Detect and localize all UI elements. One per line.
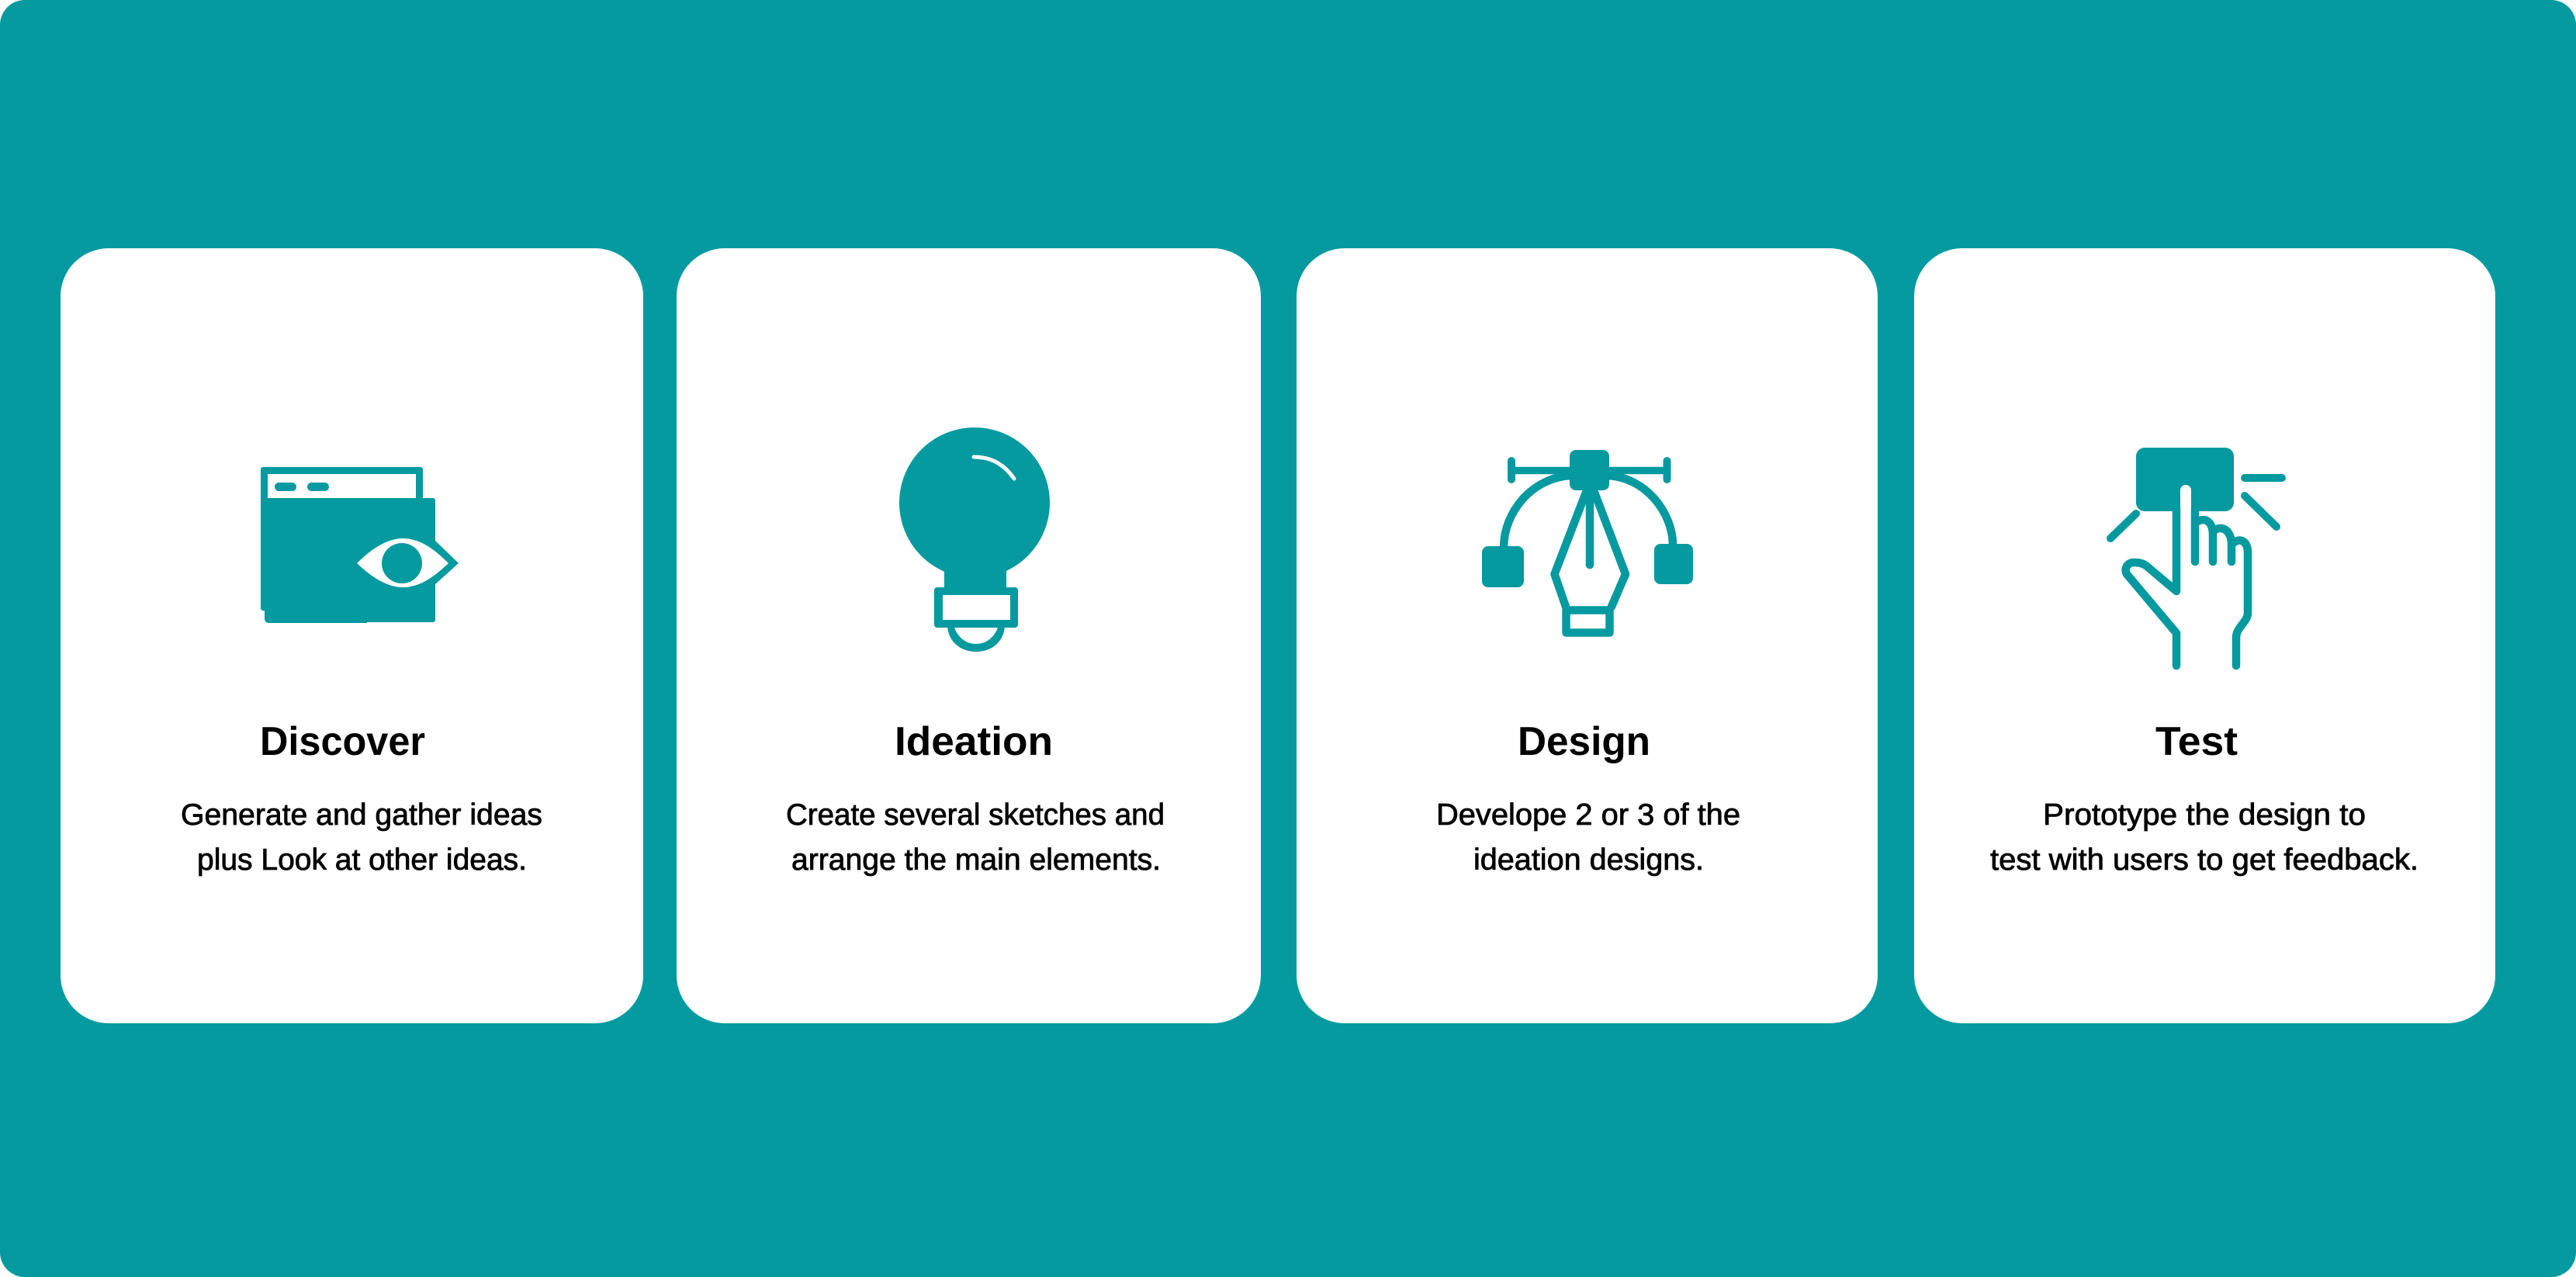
description: Ideation: Create several sketches and [786,798,1165,832]
heading: Design: Design [1518,719,1650,764]
heading: Discover: Discover [260,719,425,764]
description: Design: Develope 2 or 3 of the [1436,798,1740,832]
description: Design [1436,798,1740,877]
heading: Test: Test [2155,719,2238,764]
description: Ideation [786,798,1165,877]
panel: test [1914,248,2495,1023]
description: Test: Prototype the design to [2043,798,2366,832]
ideation card background [677,248,1261,1023]
icon: browser window with eye [261,467,459,623]
discover card background [61,248,643,1023]
description: Test: test with users to get feedback. [1990,843,2418,877]
design card background [1297,248,1878,1023]
description: Discover: Generate and gather ideas [181,798,542,832]
description: Design: ideation designs. [1473,843,1704,877]
heading: Ideation: Ideation [895,719,1053,764]
icon: light bulb [899,427,1050,652]
panel: discover [61,248,643,1023]
test card background [1914,248,2495,1023]
description: Ideation: arrange the main elements. [791,843,1161,877]
description: Test [1990,798,2418,877]
panel: ideation [677,248,1261,1023]
description: Discover [181,798,542,877]
description: Discover: plus Look at other ideas. [197,843,527,877]
icon: hand pressing a button [2110,448,2282,666]
panel: design [1297,248,1878,1023]
icon: vector pen tool [1482,450,1693,633]
